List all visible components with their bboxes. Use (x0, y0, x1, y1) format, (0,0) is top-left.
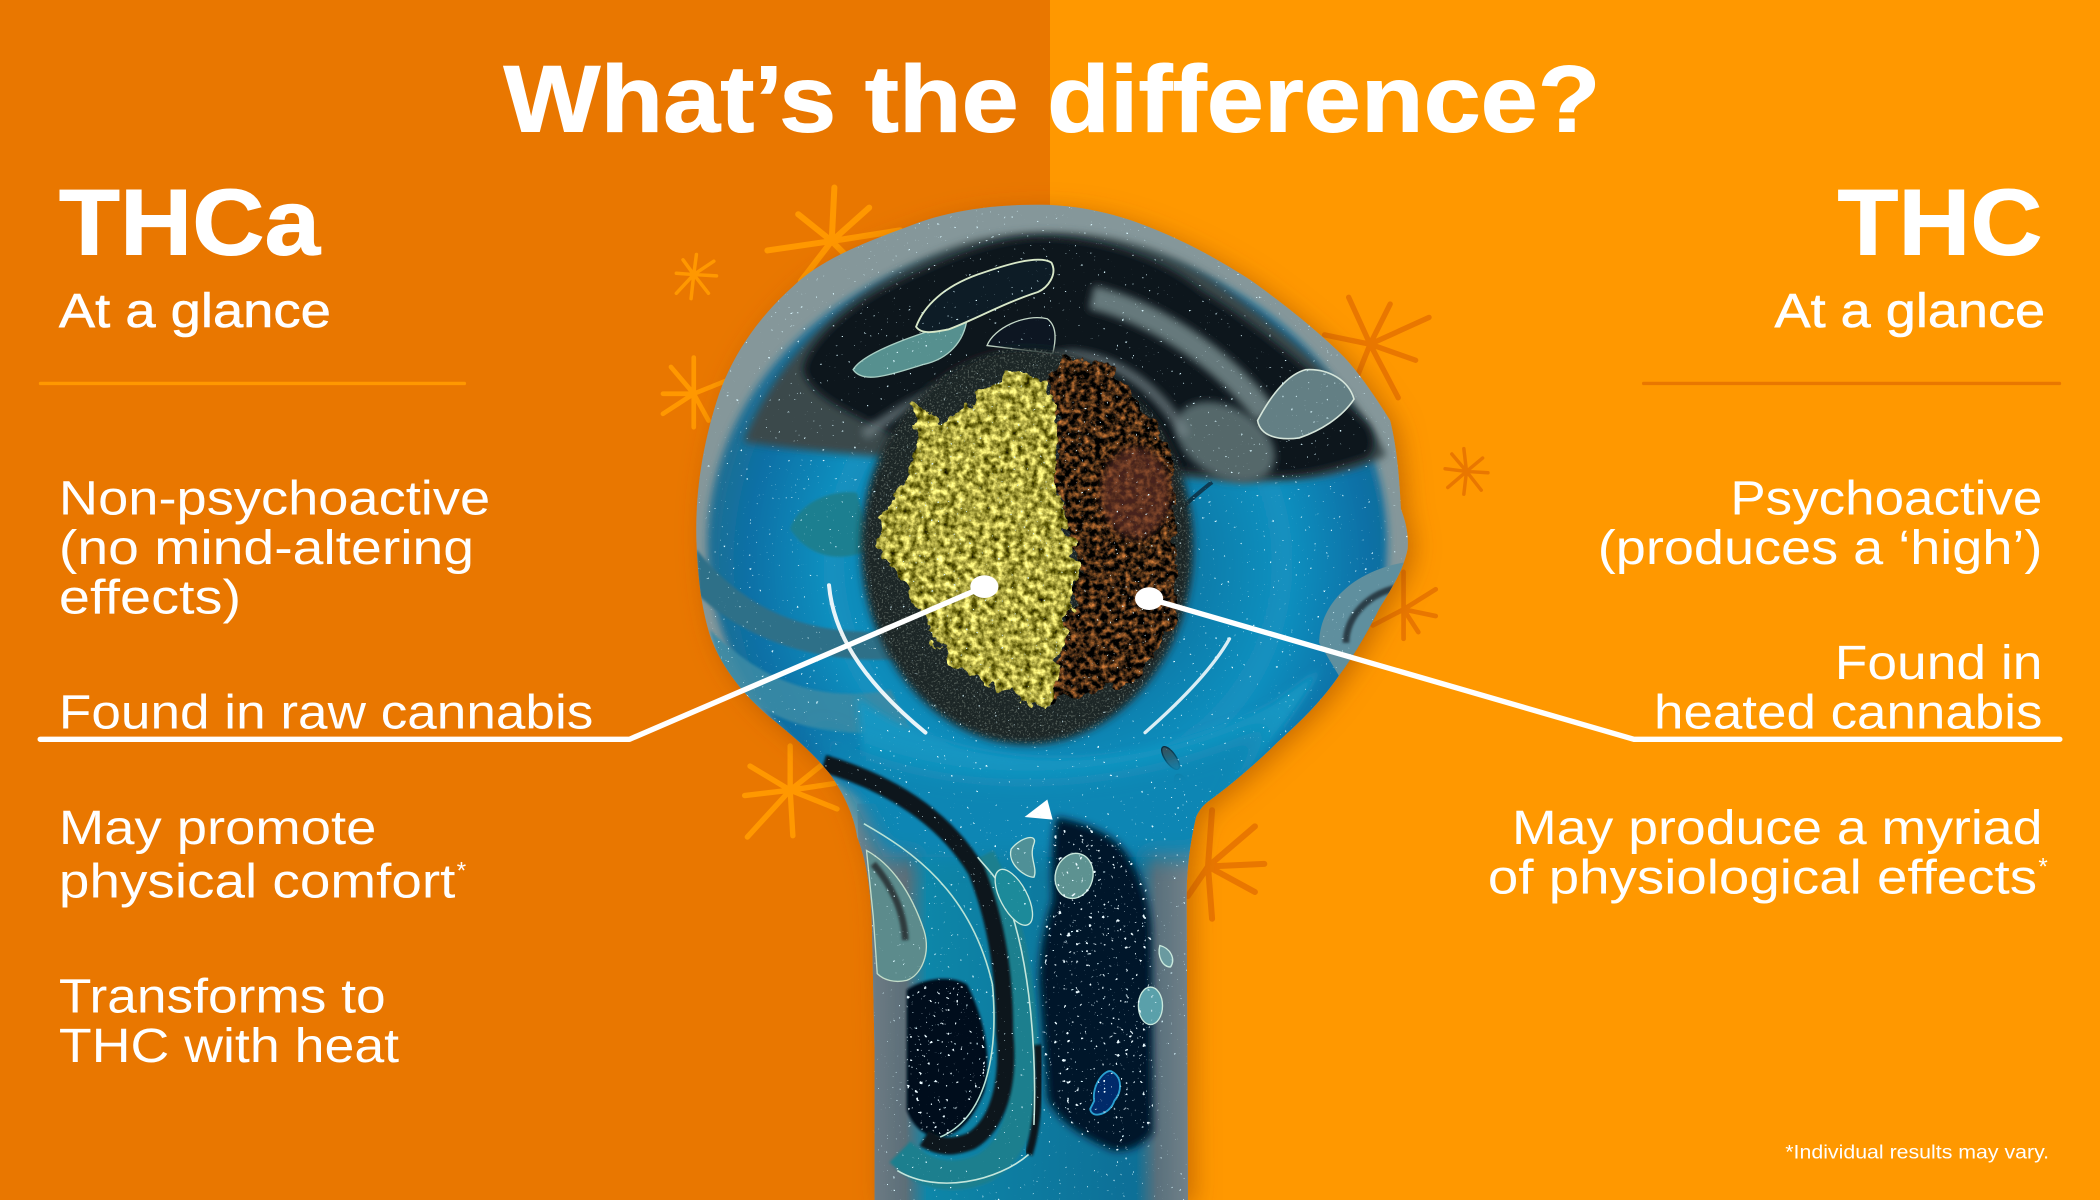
right bottom lobe (1319, 562, 1406, 678)
dark chamber (861, 348, 1193, 745)
THC point: heated cannabis: heated cannabis (1654, 686, 2042, 740)
callout line: heated THC to herb (1135, 587, 2060, 739)
heading: THC: THC (1837, 169, 2042, 274)
THC point: physiological effects: of physiological effects (1488, 850, 2037, 904)
THC point: heated cannabis: Found in (1835, 636, 2042, 690)
THC point: physiological effects: * (2038, 854, 2048, 881)
heading: THCa: THCa (59, 169, 321, 274)
dark navy neck right (1039, 817, 1153, 1151)
lower left stripes (696, 549, 894, 662)
THC point: psychoactive: (produces a ‘high’) (1598, 521, 2042, 575)
divider right (1642, 382, 2061, 385)
THC point: physiological effects: May produce a myriad (1512, 801, 2042, 855)
THCa point: physical comfort: physical comfort (59, 854, 456, 908)
neck swirl teal band (900, 857, 1024, 1175)
light swirl outlines (864, 824, 994, 1137)
silver glass ring around chamber (864, 355, 1185, 435)
neck swirl dark stripe (824, 763, 1006, 1146)
small swirl outline (987, 318, 1055, 354)
THCa point: transforms with heat: THC with heat (59, 1019, 400, 1073)
THCa point: physical comfort: * (457, 858, 466, 885)
inner navy blob (907, 979, 988, 1137)
dark upper glass (804, 237, 1374, 476)
reddish burnt patch (1101, 447, 1171, 538)
THC point: psychoactive: Psychoactive (1730, 471, 2042, 525)
right lobe inner curve (1346, 587, 1404, 643)
pipe neck (857, 804, 1205, 1200)
THCa point: non-psychoactive: (no mind-altering (59, 521, 474, 575)
teal lobe top left (853, 319, 967, 377)
THC point: physiological effects (1488, 801, 2048, 904)
glass highlight left (829, 585, 925, 733)
blue glass bowl (707, 242, 1388, 845)
THCa point: physical comfort (59, 801, 466, 908)
green raw herb (880, 371, 1079, 710)
glass highlight right (1145, 639, 1229, 733)
blue bubble in neck (1090, 1071, 1120, 1115)
right teal lobe (1258, 370, 1354, 439)
silver band top right (1092, 297, 1266, 415)
grey teal spiral lobe (867, 850, 926, 981)
THCa point: non-psychoactive (59, 471, 490, 624)
lower bowl bright blue (854, 672, 1318, 821)
dark glass spots (1161, 746, 1180, 774)
left panel text: THCa (39, 169, 593, 1073)
THC point: heated cannabis (1654, 636, 2042, 740)
footnote: *Individual results may vary. (1785, 1141, 2049, 1163)
callout line: raw THCa to herb (40, 575, 998, 739)
sparse sparkle specks (670, 188, 1433, 1200)
spiral dark curve (873, 864, 905, 940)
narrow dark stripe right of teal band (1029, 1045, 1039, 1154)
subheading: at a glance right: At a glance (1775, 284, 2045, 338)
blue blend between bowl and neck (817, 723, 1272, 857)
brown burnt herb (1049, 358, 1176, 702)
chamber grit (861, 348, 1193, 745)
right panel text: THC (1488, 169, 2061, 904)
decorative stars on left panel (663, 188, 900, 837)
translucent grey area right of chamber (1169, 396, 1280, 488)
pipe rim (670, 188, 1433, 1200)
dense sparkle specks on navy glass (884, 804, 1179, 1165)
THCa point: physical comfort: May promote (59, 801, 376, 855)
right side swirl line (1184, 480, 1214, 508)
THC point: psychoactive (1598, 471, 2042, 575)
divider left (39, 382, 466, 385)
left orange panel background (0, 0, 1050, 1200)
swirl outline top (916, 260, 1053, 332)
THCa point: non-psychoactive: effects) (59, 570, 241, 624)
THCa point: raw cannabis: Found in raw cannabis (59, 686, 593, 740)
right orange panel background (1050, 0, 2100, 1200)
decorative stars on right panel (1188, 297, 1488, 919)
glass pipe illustration (670, 188, 1433, 1200)
THCa point: transforms with heat (59, 969, 400, 1073)
title: What’s the difference? (504, 46, 1600, 152)
small teal lobes in neck (988, 838, 1173, 1025)
subheading: at a glance: At a glance (59, 284, 331, 338)
THCa point: non-psychoactive: Non-psychoactive (59, 471, 490, 525)
left teal bubble (790, 492, 871, 557)
upper grey band (743, 232, 1386, 481)
THCa point: transforms with heat: Transforms to (59, 969, 386, 1023)
white reflection triangle (1025, 800, 1053, 820)
